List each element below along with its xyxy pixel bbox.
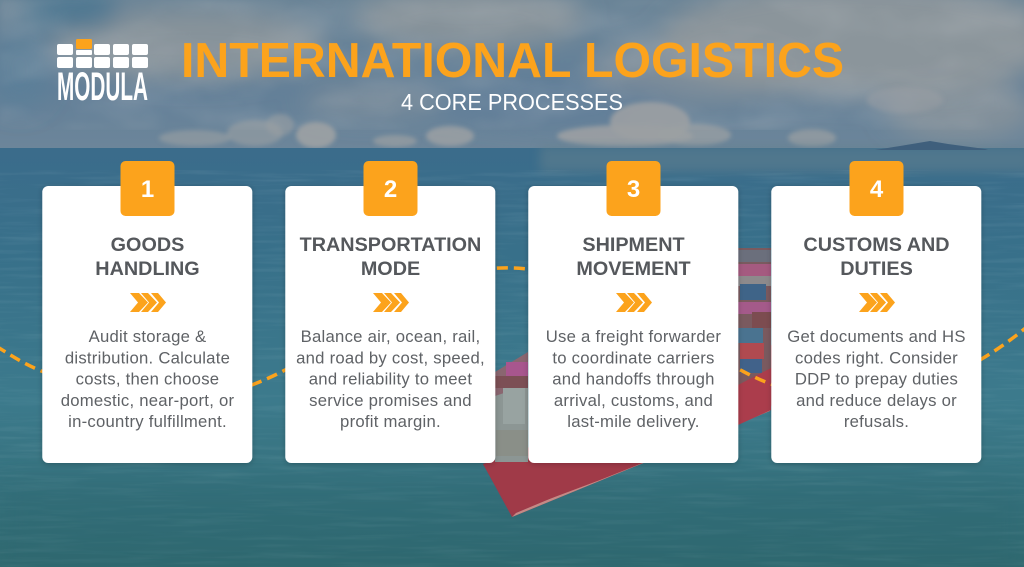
subtitle: 4 CORE PROCESSES xyxy=(401,89,623,115)
heading: MOVEMENT xyxy=(576,258,691,280)
heading: SHIPMENT xyxy=(582,234,685,256)
heading: GOODS xyxy=(111,234,184,256)
body text: and reliability to meet xyxy=(309,370,472,389)
heading: TRANSPORTATION xyxy=(300,234,481,256)
body text: Balance air, ocean, rail, xyxy=(301,327,480,346)
background: sea xyxy=(0,146,1024,567)
body text: DDP to prepay duties xyxy=(795,370,958,389)
body text: Get documents and HS xyxy=(787,327,966,346)
body text: to coordinate carriers xyxy=(552,348,715,367)
body text: arrival, customs, and xyxy=(554,391,713,410)
step badge 4: 4 xyxy=(870,176,884,203)
icon: chevrons xyxy=(859,293,895,312)
container ship xyxy=(483,248,790,517)
body text: service promises and xyxy=(309,391,472,410)
body text: distribution. Calculate xyxy=(65,348,230,367)
body text: and road by cost, speed, xyxy=(296,348,485,367)
body text: and reduce delays or xyxy=(796,391,957,410)
logo: Modula xyxy=(57,39,148,109)
dashed route line xyxy=(0,268,1024,390)
step badge 3 xyxy=(606,161,660,216)
heading: HANDLING xyxy=(95,258,200,280)
heading: DUTIES xyxy=(840,258,913,280)
island on horizon xyxy=(875,141,988,150)
step badge 1 xyxy=(120,161,174,216)
panel: shipment movement xyxy=(528,161,738,463)
title: INTERNATIONAL LOGISTICS xyxy=(181,34,844,88)
body text: codes right. Consider xyxy=(795,348,958,367)
icon: chevrons xyxy=(130,293,166,312)
step badge 4 xyxy=(850,161,904,216)
body text: domestic, near-port, or xyxy=(61,391,234,410)
logo: Modula: MODULA xyxy=(57,65,148,109)
body text: last-mile delivery. xyxy=(567,412,700,431)
panel: transportation mode xyxy=(285,161,495,463)
step badge 3: 3 xyxy=(627,176,640,203)
body text: and handoffs through xyxy=(552,370,715,389)
step badge 1: 1 xyxy=(141,176,154,203)
step badge 2 xyxy=(364,161,418,216)
body text: profit margin. xyxy=(340,412,441,431)
step badge 2: 2 xyxy=(384,176,397,203)
body text: in-country fulfillment. xyxy=(68,412,227,431)
body text: Audit storage & xyxy=(89,327,206,346)
icon: chevrons xyxy=(616,293,652,312)
panel: goods handling xyxy=(42,161,252,463)
body text: refusals. xyxy=(844,412,909,431)
heading: CUSTOMS AND xyxy=(803,234,950,256)
heading: MODE xyxy=(361,258,420,280)
panel: customs and duties xyxy=(771,161,981,463)
icon: chevrons xyxy=(373,293,409,312)
body text: Use a freight forwarder xyxy=(546,327,721,346)
body text: costs, then choose xyxy=(76,370,219,389)
background: sky with clouds xyxy=(0,0,1024,152)
